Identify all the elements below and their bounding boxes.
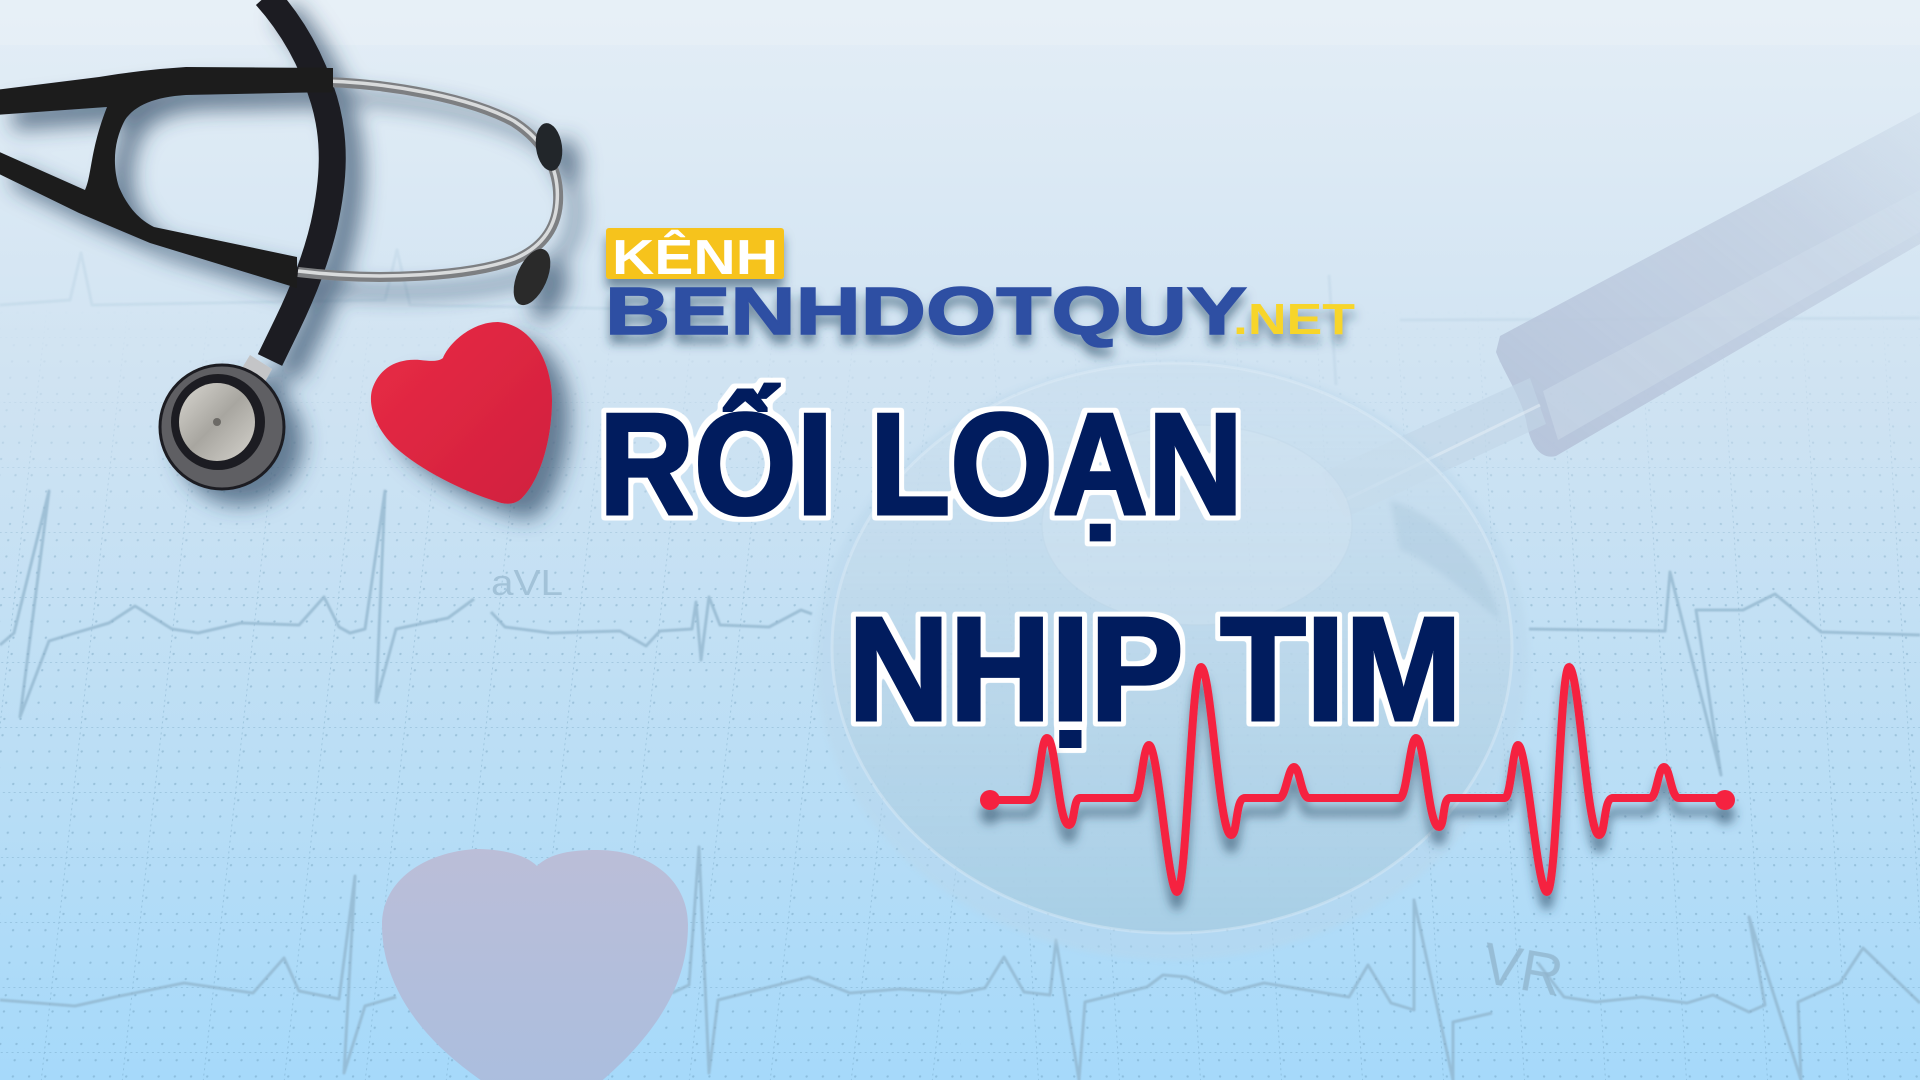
stethoscope tube (faded) [1496,112,1920,457]
logo: BENHDOTQUY wordmark: BENHDOTQUY [605,274,1247,349]
background: faded ECG traces [0,250,1920,1080]
chest piece inner circle [1042,425,1352,625]
ECG heartbeat line [980,667,1735,892]
stethoscope: rear tube [266,0,332,360]
chest piece disc (faded) [832,363,1512,933]
stethoscope: bottom ear tip [506,243,558,311]
chest piece rim (faded) [816,360,1528,960]
stethoscope: binaural rubber yoke [0,67,333,288]
stethoscope stem (faded) [1321,378,1546,518]
logo: .NET suffix: .NET [1233,295,1355,344]
icon: red heart [371,322,552,504]
background: faded stethoscope [816,112,1920,960]
stethoscope: metal highlight [298,81,557,276]
stethoscope: top ear tip [533,121,565,173]
background: faded heart [382,849,688,1080]
chest piece shadow crescent [1390,500,1500,620]
icon: stethoscope [0,0,565,489]
stethoscope: metal tube [298,82,558,277]
logo: yellow KÊNH badge: KÊNH [612,230,778,285]
stethoscope: stem [232,355,272,398]
background text: VR marking: VR [1477,931,1568,1009]
logo: kenhbenhdotquy.net [605,228,1355,349]
stethoscope: chest piece [160,365,284,489]
title line 1: RỐI LOẠN [599,383,1243,545]
title line 2: NHỊP TIM [848,587,1462,752]
background text: aVL marking: aVL [491,562,563,603]
